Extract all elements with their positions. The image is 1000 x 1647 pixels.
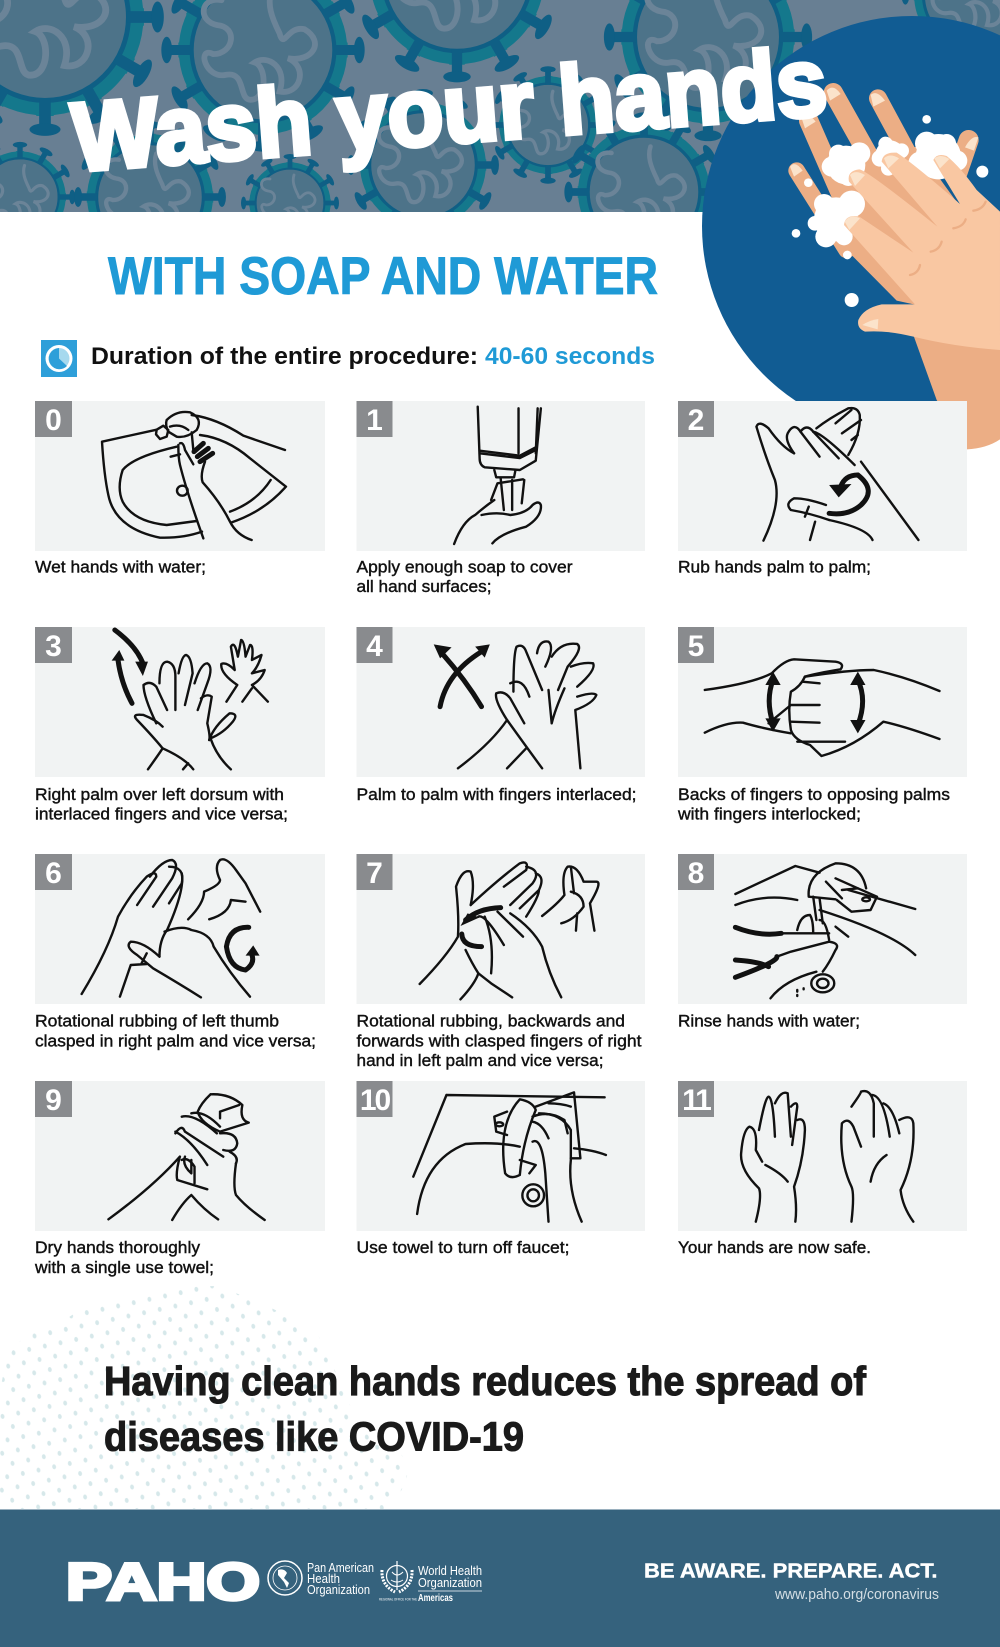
title: Wash your hands: Wash your hands [68, 27, 830, 192]
step 9: dry: Dry hands thoroughly [35, 1239, 201, 1257]
halftone dot pattern [0, 1280, 420, 1510]
text: World Health Organization Americas [379, 1563, 482, 1604]
step 9: dry: with a single use towel; [34, 1259, 214, 1277]
step 6: thumb rotation: 6 [45, 857, 62, 890]
step 7: clasped fingers: Rotational rubbing, backwards and [356, 1013, 625, 1031]
step 1: apply soap: all hand surfaces; [356, 578, 492, 596]
header banner with virus pattern [0, 0, 1000, 212]
step 7: clasped fingers: forwards with clasped fingers of right [356, 1033, 642, 1051]
step 0: wet hands: 0 [45, 404, 62, 437]
text: World Health Organization Americas: Organization [418, 1575, 482, 1590]
closing statement [104, 1358, 866, 1460]
logo: PAHO emblem [268, 1561, 302, 1595]
text: World Health Organization Americas: Americas [418, 1592, 453, 1604]
text: Pan American Health Organization: Organization [307, 1582, 370, 1597]
step 11: safe hands [678, 1081, 967, 1257]
step 0: wet hands: Wet hands with water; [35, 559, 206, 577]
subtitle: with soap and water: WITH SOAP AND WATER [108, 247, 658, 306]
step 0: wet hands [35, 401, 325, 577]
step 5: backs of fingers: Backs of fingers to opposing palms [678, 786, 950, 804]
step 3: palm over dorsum: interlaced fingers and vice versa; [35, 806, 288, 824]
logo: WHO emblem [382, 1561, 412, 1592]
logo: PAHO: PAHO [66, 1554, 260, 1612]
step 5: backs of fingers: 5 [688, 630, 704, 663]
step 3: palm over dorsum: 3 [45, 630, 62, 663]
step 3: palm over dorsum: Right palm over left dorsum with [35, 786, 284, 804]
step 10: towel on faucet: Use towel to turn off faucet; [356, 1239, 570, 1257]
step 1: apply soap: 1 [366, 404, 383, 437]
step 10: towel on faucet: 10 [360, 1084, 390, 1117]
icon: clock [41, 340, 77, 377]
step 8: rinse: 8 [688, 857, 704, 890]
website: www.paho.org/coronavirus [774, 1587, 939, 1603]
text: Pan American Health Organization [307, 1560, 374, 1597]
step 7: clasped fingers: 7 [366, 857, 383, 890]
step 6: thumb rotation: clasped in right palm and vice versa; [35, 1033, 316, 1051]
duration line [91, 343, 655, 370]
step 4: fingers interlaced: 4 [366, 630, 383, 663]
step 4: fingers interlaced [356, 627, 645, 804]
blue circle behind hand [702, 16, 1000, 436]
closing statement: Having clean hands reduces the spread of [104, 1358, 866, 1404]
step 7: clasped fingers: hand in left palm and vice versa; [356, 1052, 604, 1070]
step 3: palm over dorsum [35, 627, 325, 824]
step 2: palm to palm: 2 [688, 404, 704, 437]
step 11: safe hands: Your hands are now safe. [678, 1239, 871, 1257]
duration line: 40-60 seconds [485, 343, 655, 370]
step 9: dry: 9 [45, 1084, 62, 1117]
step 10: towel on faucet [356, 1081, 645, 1257]
step 11: safe hands: 11 [682, 1084, 711, 1117]
step 8: rinse [678, 854, 967, 1031]
step 4: fingers interlaced: Palm to palm with fingers interlaced; [356, 786, 636, 804]
text: World Health Organization Americas: World Health [418, 1563, 482, 1578]
step 5: backs of fingers [677, 627, 967, 824]
text: World Health Organization Americas: REGIONAL OFFICE FOR THE [379, 1596, 417, 1602]
step 1: apply soap [356, 401, 645, 596]
footer band [0, 1510, 1000, 1647]
step 6: thumb rotation: Rotational rubbing of left thumb [35, 1013, 279, 1031]
step 9: dry [34, 1081, 325, 1277]
text: Pan American Health Organization: Pan American [307, 1560, 374, 1575]
slogan: BE AWARE. PREPARE. ACT. [644, 1561, 938, 1583]
step 7: clasped fingers [356, 854, 645, 1070]
step 6: thumb rotation [35, 854, 325, 1051]
text: Pan American Health Organization: Health [307, 1571, 340, 1586]
step 2: palm to palm: Rub hands palm to palm; [678, 559, 871, 577]
step 2: palm to palm [678, 401, 967, 577]
illustration: soapy hands [790, 88, 1000, 449]
step 1: apply soap: Apply enough soap to cover [356, 559, 573, 577]
step 8: rinse: Rinse hands with water; [678, 1013, 860, 1031]
step 5: backs of fingers: with fingers interlocked; [677, 806, 861, 824]
closing statement: diseases like COVID-19 [104, 1414, 524, 1460]
duration line: Duration of the entire procedure: [91, 343, 478, 370]
